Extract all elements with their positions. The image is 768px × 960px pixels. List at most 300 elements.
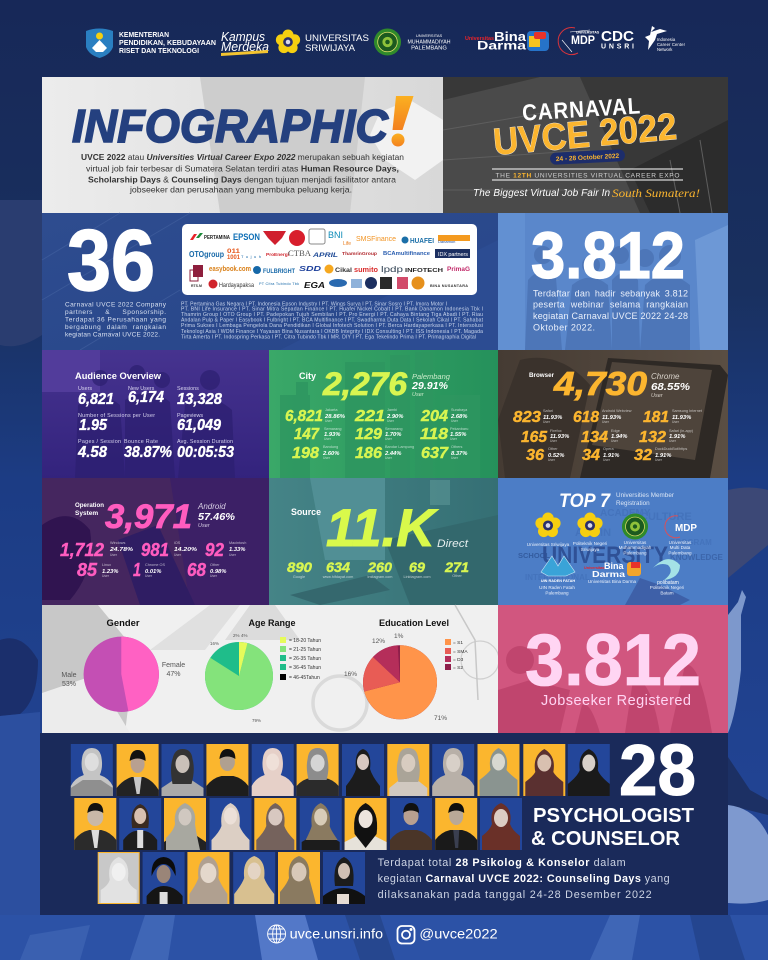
chart: Age Range pie: = 46-45Tahun [289, 675, 320, 681]
headline: 2,276 Palembang: 2,276 [322, 366, 407, 402]
chart: Education Level pie [344, 618, 468, 722]
partner logos card: PERTAMINA [204, 235, 230, 241]
tagline: biggest virtual job fair [473, 188, 700, 200]
stat: Semarang second: User [385, 437, 393, 441]
university: Multi Data Palembang: MDP [675, 523, 697, 534]
stat: Others: 637 [421, 445, 449, 462]
stat: Linktagram: 69 [409, 559, 425, 575]
stat: Other browser [526, 447, 564, 464]
panel: top 7 universities: INTERNATIONAL [525, 573, 590, 582]
logo: Universitas Muhammadiyah Palembang [374, 28, 450, 56]
stat: Semarang second: Semarang [385, 427, 403, 431]
partner logos card: FULBRIGHT [263, 268, 295, 275]
stat: Other OS [187, 560, 226, 580]
stat: Edge: Edge [611, 429, 620, 433]
stat: Surabaya: Surabaya [451, 408, 468, 412]
panel: psychologist and counselor [40, 731, 728, 915]
stat: Jambi [354, 408, 403, 425]
university: Polsri: Sriwijaya [581, 547, 600, 552]
counselor description: kegiatan Carnaval UVCE 2022: Counseling Days yang [378, 873, 670, 885]
chart: Education Level pie: 16% [344, 671, 357, 678]
university: Bina Darma: Universitas [584, 566, 604, 570]
panel: top 7 universities: UNIVERSITY [542, 542, 668, 569]
webinar description: Oktober 2022. [533, 322, 595, 332]
panel: top 7 universities: ACADEMY [600, 508, 651, 519]
footer: instagram: @uvce2022 [419, 926, 498, 942]
headline: 3,971 Android: Android [197, 502, 226, 511]
partner logos card [182, 224, 477, 295]
webinar description: peserta webinar selama rangkaian [533, 300, 688, 310]
stat: Semarang: User [324, 437, 332, 441]
stat: Samsung Internet: 181 [643, 409, 669, 426]
logo: CDC UNSRI: UNSRI [601, 44, 634, 50]
headline: 3,971 Android [105, 498, 236, 536]
heading: TOP 7 [559, 490, 674, 512]
partner logos card: 011 [227, 249, 241, 255]
stat: Macintosh [205, 540, 246, 560]
stat: Others [421, 445, 467, 462]
partner logos card: Danamon [438, 239, 455, 244]
partners description: Terdapat 36 Perusahaan yang [65, 316, 166, 324]
intro text [81, 152, 404, 194]
partner logos card: APRIL [312, 252, 338, 259]
panel: city [269, 350, 498, 478]
stat: Surabaya: User [451, 419, 459, 423]
stat: Jakarta [285, 408, 345, 425]
partners list: PT. Pertamina Gas Negara I PT. Indonesia Epson Industry I PT. Wings Surya I PT. Sinar Sosro I PT. Imora Motor I [181, 302, 447, 308]
stat: pages per session: 4.58 [77, 444, 107, 461]
heading: Psychologist & Counselor: & COUNSELOR [531, 828, 681, 850]
chart: Age Range pie: Age Range [248, 618, 296, 629]
webinar description: kegiatan Carnaval UVCE 2022 24-28 [533, 311, 688, 321]
university: UIN Raden Fatah: UIN Raden Fatah [539, 585, 575, 590]
stat: web referral [323, 559, 353, 579]
stat: Bandung: 2.60% [322, 451, 339, 457]
stat: Pekanbaru: Pekanbaru [450, 427, 468, 431]
logo: Universitas MDP [558, 28, 600, 55]
headline: 2,276 Palembang [322, 366, 451, 402]
stat: new users: New Users [128, 386, 155, 392]
partner logos card: BINA NUSANTARA [430, 284, 468, 288]
university: Sriwijaya: Universitas Sriwijaya [527, 542, 570, 547]
partner logos card: ProEnergi [266, 252, 289, 257]
heading: TOP 7: Registration [616, 500, 650, 507]
logo: Universitas Muhammadiyah Palembang: MUHAMMADIYAH [408, 40, 450, 46]
stat: Samsung Internet [643, 409, 703, 426]
headline: 4,730 Chrome [553, 365, 691, 402]
stat: iOS: User [174, 553, 182, 557]
university: Polsri: Politeknik Negeri [573, 541, 607, 546]
intro text: Scholarship Days & Counseling Days dengan tujuan menjadi fasilitator antara [88, 174, 396, 184]
university: UIN Raden Fatah: Palembang [545, 590, 569, 596]
stat: Android Webview: User [602, 420, 610, 424]
stat: Other browser: 36 [526, 447, 544, 464]
stat: Others: 8.37% [451, 451, 467, 457]
logo: Kampus Merdeka: Merdeka [221, 39, 269, 54]
big number 28: 28 [619, 731, 696, 811]
partners list: Prima Sukses I Lembaga Pengelola Dana Pendidikan I Global Infotech Solution I PT. Berca Hardayaperkasa I PT. Intersolusi [181, 323, 483, 329]
heading: TOP 7: Universities Member [616, 492, 674, 499]
partner logos card: easybook.com [209, 266, 251, 273]
panel: top 7 universities: SCHOOL [518, 551, 551, 560]
chart: Age Range pie: = 36-45 Tahun [289, 665, 321, 671]
chart: Age Range pie [205, 618, 321, 723]
headline: 3,971 Android: User [198, 523, 211, 529]
big number 3.812: 3.812 [531, 218, 685, 292]
stat: Firefox: User [550, 439, 558, 443]
stat: new users: 6,174 [128, 389, 164, 406]
stat: Firefox [521, 429, 569, 446]
university: Bina Darma: Universitas Bina Darma [588, 579, 637, 584]
stat: Samsung Internet: User [672, 420, 680, 424]
stat: Bandung: User [323, 456, 331, 460]
stat: Jakarta: User [325, 419, 333, 423]
stat: Macintosh: 1.33% [229, 547, 245, 553]
university: UIN Raden Fatah [539, 556, 575, 596]
icon: globe [268, 925, 286, 943]
stat: Windows: 24.78% [109, 547, 133, 553]
heading: Carnaval: CARNAVAL [521, 92, 642, 126]
stat: Bandung: 198 [292, 445, 319, 462]
stat: Pekanbaru [420, 426, 468, 443]
big number 3.812: 3.812 [525, 620, 701, 701]
stat: Chrome OS: 1 [133, 560, 141, 580]
logo: Indonesia Career Center Network: Network [657, 47, 673, 52]
headline: 11.K Direct: 11.K [326, 499, 439, 558]
stat: Safari: Safari [543, 409, 553, 413]
label: Browser: Browser [529, 372, 554, 379]
stat: Chrome OS: 0.01% [145, 569, 161, 575]
stat: Linux: 85 [77, 560, 98, 580]
stat: bounce rate: Bounce Rate [124, 439, 158, 445]
footer: website [268, 925, 383, 943]
stat: Firefox: 11.93% [550, 434, 569, 440]
stat: Other browser: Other [548, 447, 558, 451]
panel: webinar attendance [498, 213, 728, 350]
heading: Psychologist & Counselor [531, 805, 694, 850]
partner logos card: SDD [299, 266, 321, 273]
footer: website: uvce.unsri.info [290, 926, 383, 942]
stat: Linux [77, 560, 118, 580]
partner logos card: CTBA [288, 249, 311, 258]
partners description: bergabung dalam rangkaian [65, 324, 166, 331]
stat: Pekanbaru: 118 [420, 426, 448, 443]
stat: Bandar Lampung: 186 [355, 445, 382, 462]
heading: UVCE 2022: UVCE 2022 [491, 106, 678, 164]
stat: Bandung: Bandung [323, 445, 338, 449]
logo: Universitas Muhammadiyah Palembang: PALEMBANG [411, 46, 447, 52]
stat: Other browser: User [548, 458, 556, 462]
stat: DuckDuckBot: 32 [634, 447, 652, 464]
chart: Age Range pie: 4% [241, 633, 248, 638]
label: Operation System: System [75, 510, 98, 517]
chart: Education Level pie: = SMA [453, 649, 468, 655]
stat: Bandung [292, 445, 339, 462]
tagline: biggest virtual job fair: South Sumatera! [612, 188, 700, 200]
partner logos card: PrimaG [447, 267, 470, 273]
stat: Surabaya: 2.68% [450, 414, 467, 420]
logo: Universitas MDP: UNIVERSITAS [576, 30, 600, 34]
stat: Jambi: 221 [354, 408, 385, 425]
stat: web referral: www.hifdayat.com [323, 575, 353, 579]
stat: Linktagram: Linktagram.com [403, 575, 431, 579]
stat: average session duration: 00:05:53 [177, 444, 234, 461]
stat: Edge: User [611, 439, 619, 443]
stat: Edge: 1.94% [611, 434, 627, 440]
stat: Linktagram [403, 559, 431, 579]
university: Muhammadiyah Palembang: Muhammadiyah [619, 545, 652, 550]
panel: audience overview [42, 350, 269, 478]
headline: 2,276 Palembang: 29.91% [411, 381, 448, 392]
chart: Age Range pie: 79% [252, 718, 261, 723]
stat: Firefox: 165 [521, 429, 548, 446]
stat: Jambi: 2.90% [386, 414, 403, 420]
stat: Edge: 134 [581, 429, 608, 446]
logo: Universitas Sriwijaya [276, 30, 369, 54]
logo: Kemendikbud: KEMENTERIAN [119, 30, 169, 39]
stat: Semarang second: 129 [355, 426, 382, 443]
panel: top 7 universities: CULTURE [640, 511, 692, 523]
heading: INFOGRAPHIC!: INFOGRAPHIC [72, 100, 389, 152]
panel: browser [498, 350, 728, 478]
stat: iOS: iOS [174, 541, 181, 545]
stat: Other browser: 0.52% [548, 453, 564, 459]
tagline: 12th expo [492, 169, 683, 180]
stat: Safari: 823 [513, 409, 541, 426]
university: Politeknik Batam: polibatam [657, 580, 679, 586]
partners description: Carnaval UVCE 2022 Company [65, 302, 167, 308]
stat: Android Webview: 618 [573, 409, 599, 426]
tagline: 12th expo: THE 12TH UNIVERSITIES VIRTUAL CAREER EXPO [496, 172, 680, 180]
stat: Safari in-app: User [669, 439, 677, 443]
headline: 3,971 Android: 3,971 [105, 498, 192, 536]
stat: Macintosh: Macintosh [229, 541, 246, 545]
stat: Firefox: Firefox [550, 429, 562, 433]
panel: top 7 universities: ADMIN [575, 527, 611, 539]
partner logos card: EGA [304, 281, 325, 290]
webinar description [533, 288, 688, 332]
partner logos card: BCAmultifinance [383, 251, 430, 257]
stat: Android Webview [573, 409, 632, 426]
partners list: PT. BNI Life Insurance I PT. Sinar Mitra Sepadan Finance I PT. Huafei Nickel Cobalt I PT. Bank Danamon Indonesia Tbk I [181, 306, 483, 312]
counselor description: Terdapat total 28 Psikolog & Konselor dalam [378, 857, 626, 869]
stat: Android Webview: Android Webview [602, 409, 632, 413]
chart: Education Level pie: = S1 [453, 640, 463, 646]
logo: Universitas Sriwijaya: UNIVERSITAS [305, 33, 369, 44]
webinar description: Terdaftar dan hadir sebanyak 3.812 [533, 288, 688, 298]
partners description [65, 302, 167, 338]
intro text: UVCE 2022 atau Universities Virtual Career Expo 2022 merupakan sebuah kegiatan [81, 152, 404, 162]
partner logos card: Cikal [335, 267, 352, 274]
stat: Opera [582, 447, 619, 464]
big number 36: 36 [67, 213, 155, 309]
stat: DuckDuckBot: User [655, 458, 663, 462]
partner logos card: lpdp [381, 265, 404, 274]
chart: Gender pie: 53% [62, 681, 76, 688]
partner logos card: Hardayapaksa [219, 283, 255, 289]
headline: 2,276 Palembang: User [412, 392, 425, 398]
chart: Education Level pie: 1% [394, 633, 404, 640]
stat: sessions per user [78, 413, 155, 434]
date pill [550, 149, 625, 165]
stat: Other OS: User [210, 574, 218, 578]
stat: Other source: Other [452, 574, 462, 578]
university: Politeknik Batam: Politeknik Negeri [650, 585, 684, 590]
university: UIN Raden Fatah: UIN RADEN FATAH [541, 579, 575, 583]
university: Multi Data Palembang: Multi Data [670, 545, 691, 550]
panel: demographics [42, 605, 499, 733]
logo: Universitas MDP: MDP [571, 35, 595, 47]
stat: Macintosh: User [229, 553, 237, 557]
logo: Bina Darma [465, 29, 549, 52]
stat: pageviews: Pageviews [177, 413, 203, 419]
stat: Edge [581, 429, 627, 446]
stat: pages per session: Pages / Session [78, 439, 121, 445]
stat: Other OS: Other [210, 563, 220, 567]
portraits row 1 [71, 744, 610, 796]
stat: Safari [513, 409, 562, 426]
partners list: Andalan Pulp & Paper I Easybook I Fulbright I PT. BCA Multifinance I PT. Swadharma Duta Data I Sekolah Cikal I PT. Sahabat [181, 318, 484, 324]
logo: Indonesia Career Center Network [645, 26, 686, 52]
logo: Indonesia Career Center Network: Career Center [657, 42, 686, 47]
stat: Opera: Opera [603, 447, 614, 451]
university: Bina Darma [584, 561, 641, 584]
panel: Carnaval UVCE 2022 banner [443, 77, 728, 213]
partner logos card: ThamrinGroup [342, 251, 377, 257]
stat: Other source: 271 [444, 559, 469, 575]
stat: Windows: Windows [110, 541, 126, 545]
chart: Education Level pie: 12% [372, 638, 385, 645]
panel: top 7 universities: KNOWLEDGE [670, 553, 724, 562]
stat: Semarang [294, 426, 342, 443]
stat: sessions per user: Number of Sessions per User [78, 413, 155, 419]
stat: users: Users [78, 386, 92, 392]
label: City: City [299, 371, 316, 381]
stat: Jakarta: 6,821 [285, 408, 323, 425]
stat: average session duration: Avg. Session Duration [177, 439, 233, 445]
logo: Kampus Merdeka [221, 29, 269, 56]
partner logos card: OTOgroup [189, 250, 224, 259]
chart: Gender pie: Male [61, 672, 77, 679]
stat: Safari in-app [639, 429, 694, 446]
stat: Semarang: 147 [294, 426, 320, 443]
panel: source [269, 478, 498, 605]
stat: iOS: 981 [141, 540, 169, 560]
partner logos card: sumito [354, 265, 378, 274]
stat: Safari: 11.93% [543, 415, 562, 421]
stat: pages per session [77, 439, 121, 461]
logo: Kampus Merdeka: Kampus [221, 29, 265, 44]
chart: Age Range pie: = 18-20 Tahun [289, 638, 321, 644]
stat: Semarang second: 1.70% [385, 432, 401, 438]
stat: Windows: User [110, 553, 118, 557]
stat: Surabaya [420, 408, 468, 425]
partners description: partners & Sponsorship. [65, 309, 166, 316]
partners list: Tirta Amerta I PT. Indospring Perkasa I PT. Citra Tubindo Tbk I MR. DIY I PT. Ega Tekelindo Prima I PT. Primagraphia Digital [181, 334, 476, 340]
stat: DuckDuckBot [634, 447, 687, 464]
chart: Gender pie: Female [162, 662, 185, 669]
stat: Others: User [451, 456, 459, 460]
partner logos card: BNI [328, 230, 343, 240]
university: Politeknik Batam [650, 559, 684, 596]
stat: Opera: 34 [582, 447, 600, 464]
chart: Education Level pie: = D3 [453, 657, 464, 663]
partner logos card: INFOTECH [405, 268, 443, 274]
partner logos card: HUAFEI [410, 238, 434, 245]
stat: Safari: User [543, 420, 551, 424]
portraits row 3 [98, 852, 365, 904]
stat: Jambi: User [387, 419, 395, 423]
stat: Other OS: 68 [187, 560, 206, 580]
stat: sessions: 13,328 [177, 391, 222, 408]
stat: Other OS: 0.98% [210, 569, 226, 575]
stat: Google: 890 [287, 559, 312, 575]
stat: Semarang second [355, 426, 403, 443]
chart: Age Range pie: 2% [233, 633, 240, 638]
university: Muhammadiyah Palembang [619, 513, 652, 556]
stat: Bandar Lampung: User [385, 456, 393, 460]
label: Operation System [75, 502, 104, 517]
university: Muhammadiyah Palembang: Palembang [623, 550, 647, 556]
university: Bina Darma: Darma [592, 569, 625, 579]
stat: Windows: 1,712 [60, 540, 104, 560]
logo: Bina Darma: Darma [477, 40, 527, 52]
partner logos card: SMSFinance [356, 236, 396, 243]
caption: Jobseeker Registered: Jobseeker Registered [541, 693, 691, 709]
chart: Age Range pie: = 26-35 Tahun [289, 656, 321, 662]
stat: sessions: Sessions [177, 386, 199, 392]
headline: 4,730 Chrome: User [651, 393, 664, 399]
icon: instagram [398, 926, 414, 944]
chart: Education Level pie: = S2 [453, 665, 463, 671]
stat: DuckDuckBot: DuckDuckBot/https [655, 447, 687, 451]
stat: Windows [60, 540, 133, 560]
stat: Linux: User [102, 574, 110, 578]
intro text: virtual job fair terbesar di Sumatera Selatan terdiri atas Human Resource Days, [86, 164, 399, 174]
stat: Macintosh: 92 [205, 540, 224, 560]
footer: instagram [398, 926, 498, 944]
panel: top 7 universities: PROGRAM [670, 538, 712, 547]
stat: Chrome OS: User [145, 574, 153, 578]
logo: Kemendikbud: RISET DAN TEKNOLOGI [119, 46, 199, 55]
stat: Surabaya: 204 [420, 408, 448, 425]
stat: Opera: User [603, 458, 611, 462]
stat: Instagram: instagram.com [368, 575, 392, 579]
stat: Samsung Internet: Samsung Internet [672, 409, 703, 413]
headline: 2,276 Palembang: Palembang [412, 372, 451, 381]
university: Sriwijaya [527, 513, 570, 547]
chart: Education Level pie: 71% [434, 715, 447, 722]
panel: jobseeker registered [498, 605, 728, 733]
label: Operation System: Operation [75, 502, 104, 509]
university: Bina Darma: Bina [604, 561, 624, 571]
partners list [181, 302, 484, 340]
stat: bounce rate: 38.87% [124, 444, 172, 461]
partner logos card: RTS.M [191, 284, 202, 288]
stat: Opera: 1.91% [603, 453, 619, 459]
university: Politeknik Batam: Batam [660, 590, 674, 596]
stat: Linux: Linux [102, 563, 111, 567]
university: Muhammadiyah Palembang: Universitas [624, 540, 647, 545]
partner logos card: PT Citra Tubindo Tbk [259, 282, 299, 286]
stat: Semarang: 1.93% [324, 432, 340, 438]
university: Multi Data Palembang [665, 516, 697, 556]
stat: Bandar Lampung [355, 445, 414, 462]
heading: TOP 7: TOP 7 [559, 490, 611, 512]
stat: Safari in-app: 132 [639, 429, 666, 446]
logo: Universitas Muhammadiyah Palembang: UNIVERSITAS [416, 33, 443, 38]
panel: operation system [42, 478, 269, 605]
